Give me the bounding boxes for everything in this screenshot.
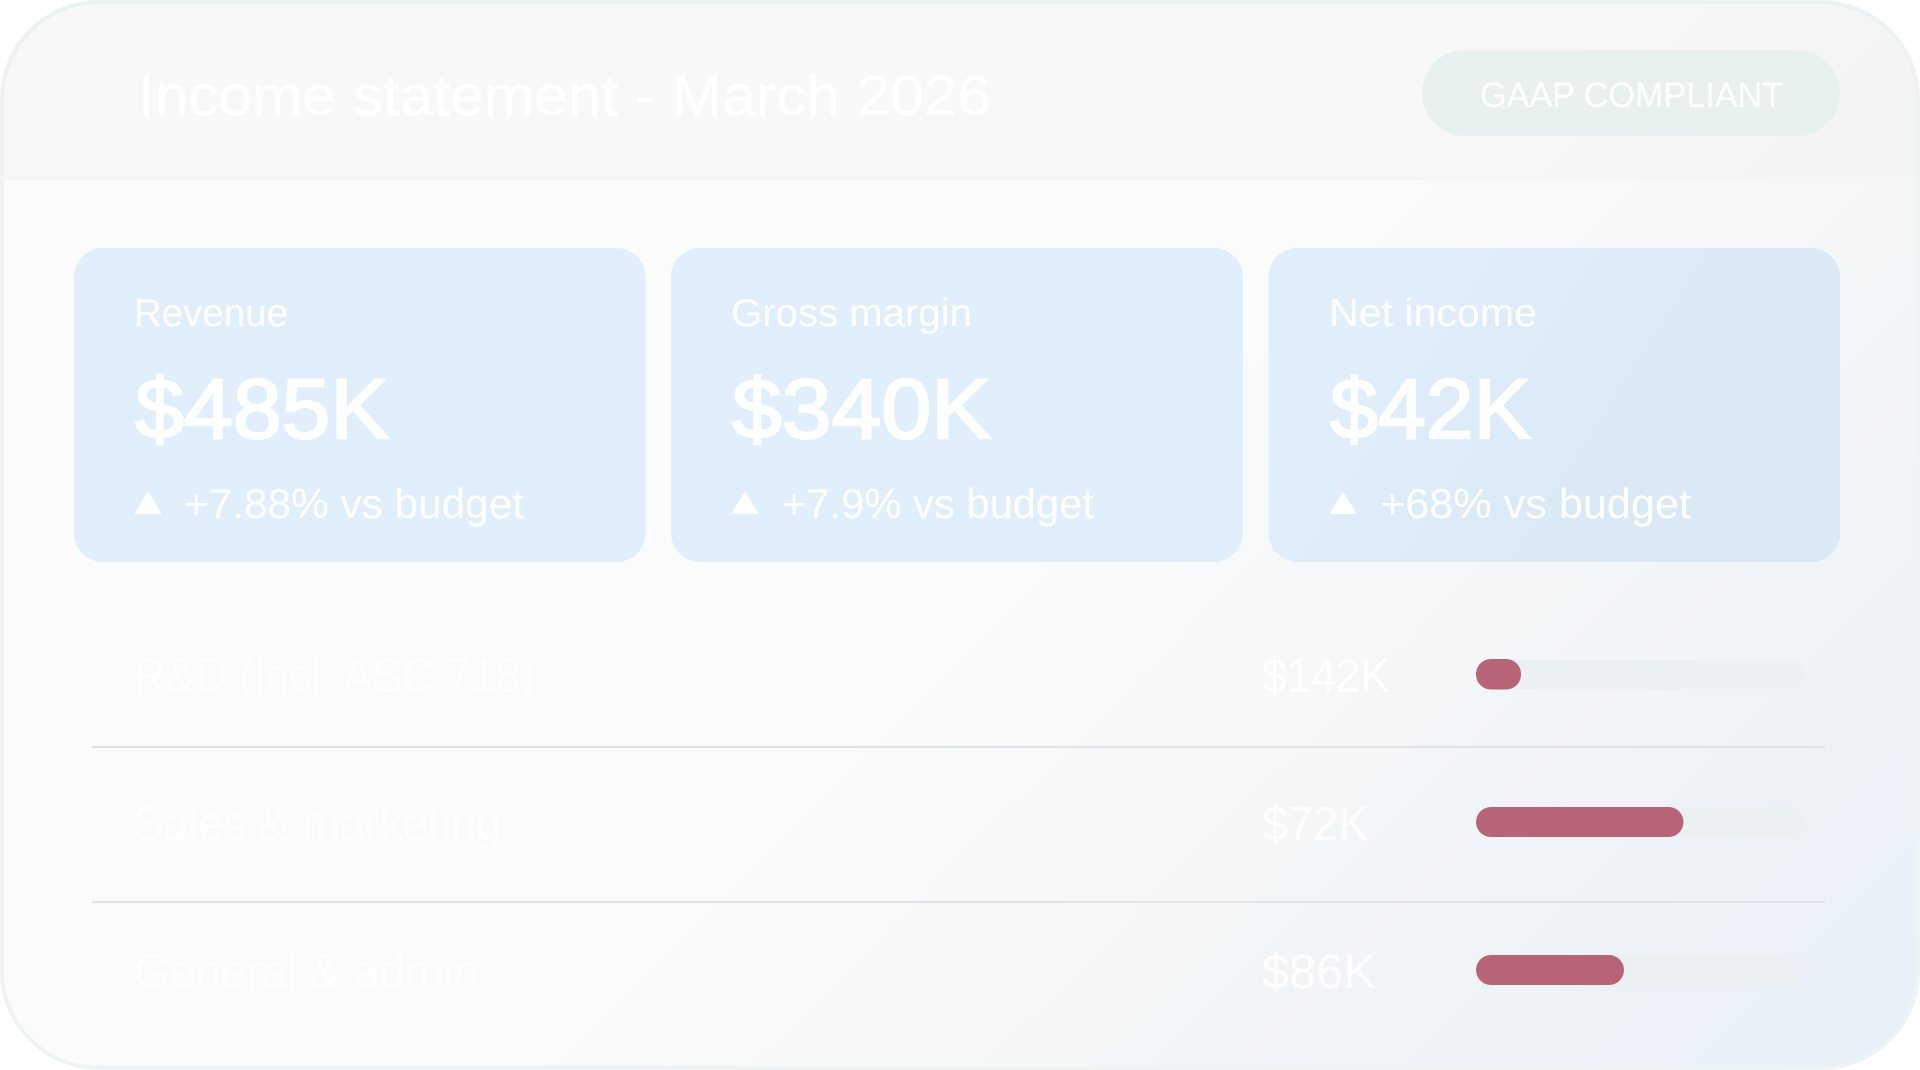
badge: GAAP compliant: GAAP COMPLIANT (1480, 76, 1783, 115)
value: net income: $42K (1330, 362, 1531, 456)
label: general and admin: General & admin (134, 946, 479, 999)
value: general and admin: $86K (1262, 946, 1376, 999)
icon: up triangle (733, 493, 757, 513)
panel: net income KPI (1268, 248, 1840, 562)
label: gross margin: Gross margin (731, 292, 972, 335)
label: revenue: Revenue (134, 292, 288, 335)
row: general and admin (134, 946, 1804, 999)
label: net income: Net income (1329, 292, 1537, 335)
badge: GAAP compliant (1422, 50, 1840, 136)
bar: sales and marketing (1476, 807, 1804, 837)
label: R&D: R&D (incl. ASC 718) (134, 650, 535, 703)
delta: revenue: +7.88% vs budget (184, 480, 524, 527)
value: gross margin: $340K (732, 362, 991, 456)
delta: net income: +68% vs budget (1380, 480, 1691, 527)
label: sales and marketing: Sales & marketing (133, 798, 501, 851)
title: Income statement - March 2026 (138, 64, 991, 128)
value: sales and marketing: $72K (1262, 798, 1369, 851)
row: R&D (134, 650, 1804, 703)
header band (0, 0, 1920, 180)
row: sales and marketing (133, 798, 1804, 851)
value: revenue: $485K (135, 362, 389, 456)
icon: up triangle (1331, 493, 1355, 513)
icon: up triangle (136, 493, 160, 513)
bar: general and admin (1476, 955, 1804, 986)
panel: revenue KPI (74, 248, 646, 562)
value: R&D: $142K (1262, 650, 1390, 703)
panel: gross margin KPI (671, 248, 1243, 562)
delta: gross margin: +7.9% vs budget (782, 480, 1094, 527)
bar: R&D (1476, 659, 1804, 690)
